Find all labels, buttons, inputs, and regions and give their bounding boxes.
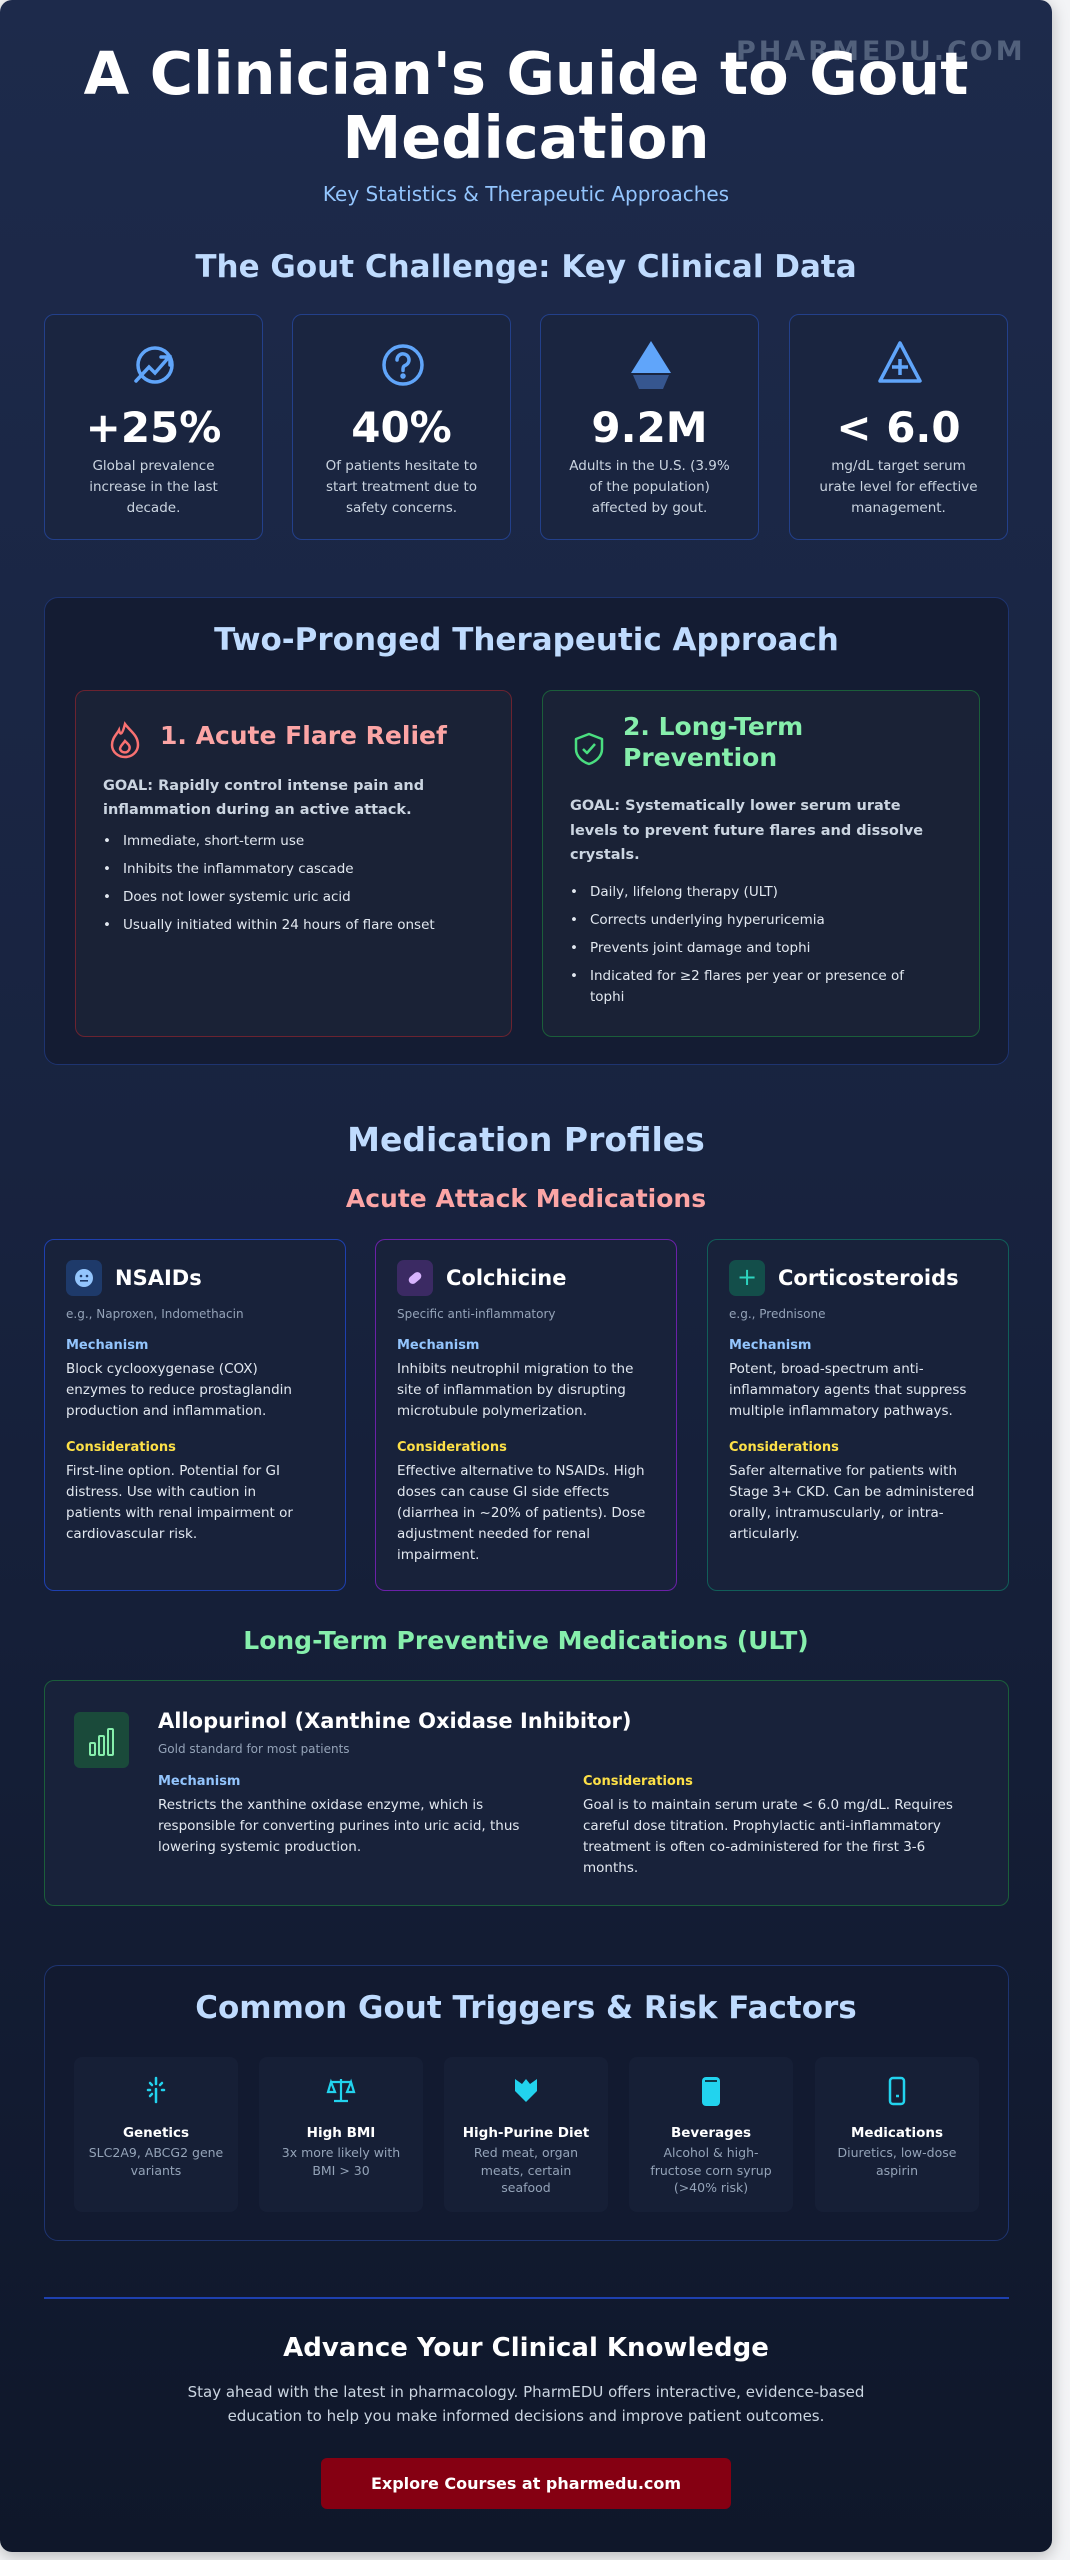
trigger: medications: Medications (851, 2125, 943, 2141)
considerations: Considerations (729, 1440, 839, 1455)
icon: plus: + (737, 1263, 757, 1291)
stat card: prevalence: Global prevalence increase in the last decade. (89, 458, 218, 516)
card: NSAIDs (44, 1239, 346, 1591)
title: Allopurinol (Xanthine Oxidase Inhibitor) (158, 1709, 632, 1733)
mechanism: Mechanism (397, 1338, 479, 1353)
mechanism: Inhibits neutrophil migration to the site of inflammation by disrupting microtubule polymerization. (397, 1361, 633, 1419)
icon: face (66, 1260, 102, 1296)
card: allopurinol (44, 1680, 1009, 1906)
title: 2. Long-Term (623, 712, 803, 741)
heading: Two-Pronged Therapeutic Approach (214, 622, 839, 658)
heading: gout challenge: The Gout Challenge: Key Clinical Data (195, 249, 857, 285)
trigger: BMI: High BMI (307, 2125, 375, 2141)
considerations: Considerations (583, 1774, 693, 1789)
divider (44, 2297, 1009, 2299)
bullets: Does not lower systemic uric acid (123, 889, 351, 905)
trigger: genetics: Genetics (123, 2125, 189, 2141)
card: Colchicine (375, 1239, 677, 1591)
trigger: BMI (259, 2057, 423, 2212)
trigger: BMI: 3x more likely with BMI > 30 (282, 2145, 400, 2178)
stat card: hesitate: 40% (351, 403, 452, 452)
mechanism: Restricts the xanthine oxidase enzyme, which is responsible for converting purines into uric acid, thus lowering systemic production. (158, 1797, 519, 1855)
icon: pill (397, 1260, 433, 1296)
title: 1. Acute Flare Relief (160, 721, 447, 750)
icon: drop (631, 341, 671, 389)
icon: plus (729, 1260, 765, 1296)
considerations: Safer alternative for patients with Stage 3+ CKD. Can be administered orally, intramuscularly, or intra-articularly. (729, 1463, 974, 1542)
watermark: PHARMEDU.COM (736, 36, 1026, 67)
considerations: First-line option. Potential for GI distress. Use with caution in patients with renal impairment or cardiovascular risk. (66, 1463, 293, 1542)
icon: trend (134, 346, 174, 384)
bullets: Usually initiated within 24 hours of flare onset (123, 917, 435, 933)
button: explore courses (321, 2458, 731, 2509)
stat card: hesitate: Of patients hesitate to start treatment due to safety concerns. (326, 458, 477, 516)
icon: question (382, 344, 424, 386)
stat card: target: urate level for effective management. (819, 479, 978, 516)
card: NSAIDs: e.g., Naproxen, Indomethacin (66, 1307, 244, 1321)
heading: medication profiles: Medication Profiles (347, 1120, 705, 1159)
mechanism: Mechanism (158, 1774, 240, 1789)
bullets: Corrects underlying hyperuricemia (590, 912, 825, 928)
trigger: diet: High-Purine Diet (463, 2125, 589, 2141)
card: Colchicine: Specific anti-inflammatory (397, 1307, 556, 1321)
goal: GOAL: Systematically lower serum urate levels to prevent future flares and dissolve crystals. (570, 798, 923, 863)
considerations: Goal is to maintain serum urate < 6.0 mg/dL. Requires careful dose titration. Prophylactic anti-inflammatory treatment is often co-administered for the first 3-6 months. (583, 1797, 953, 1876)
heading: triggers: Common Gout Triggers & Risk Factors (195, 1990, 857, 2026)
bullets (572, 884, 904, 1005)
considerations: Considerations (66, 1440, 176, 1455)
mechanism: Mechanism (729, 1338, 811, 1353)
goal: GOAL: Rapidly control intense pain and inflammation during an active attack. (103, 778, 424, 818)
panel: two-pronged approach (44, 597, 1009, 1065)
title (623, 712, 803, 772)
trigger: beverages: Beverages (671, 2125, 751, 2141)
trigger: diet (444, 2057, 608, 2212)
icon: bars (74, 1712, 129, 1768)
stat card: prevalence: +25% (86, 403, 221, 452)
subheading: acute attack: Acute Attack Medications (346, 1184, 706, 1213)
stat card: hesitate (292, 314, 511, 540)
stat card: target: mg/dL target serum (831, 458, 966, 474)
stat card: prevalence (44, 314, 263, 540)
trigger: beverages (629, 2057, 793, 2212)
bullets: Prevents joint damage and tophi (590, 940, 810, 956)
stat card: adults (540, 314, 759, 540)
considerations: Considerations (397, 1440, 507, 1455)
heading: advance knowledge: Advance Your Clinical Knowledge (283, 2333, 769, 2363)
mechanism: Potent, broad-spectrum anti-inflammatory agents that suppress multiple inflammatory pathways. (729, 1361, 966, 1419)
card: Corticosteroids (707, 1239, 1009, 1591)
stat card: adults: 9.2M (591, 403, 708, 452)
bullets: Inhibits the inflammatory cascade (123, 861, 354, 877)
stat card: target (789, 314, 1008, 540)
bullets (105, 833, 435, 933)
bullets: Daily, lifelong therapy (ULT) (590, 884, 778, 900)
mechanism: Mechanism (66, 1338, 148, 1353)
card: Corticosteroids: e.g., Prednisone (729, 1307, 825, 1321)
trigger: genetics: SLC2A9, ABCG2 gene variants (89, 2145, 223, 2178)
icon: shield (574, 732, 604, 766)
card: Colchicine: Colchicine (446, 1266, 566, 1290)
stat card: target: < 6.0 (836, 403, 961, 452)
mechanism: Block cyclooxygenase (COX) enzymes to reduce prostaglandin production and inflammation. (66, 1361, 292, 1419)
card: NSAIDs: NSAIDs (115, 1266, 202, 1290)
title (84, 39, 968, 172)
panel: triggers (44, 1965, 1009, 2241)
stat card: adults: Adults in the U.S. (3.9% of the population) affected by gout. (569, 458, 730, 516)
subtitle: Key Statistics & Therapeutic Approaches (323, 182, 729, 206)
card: Corticosteroids: Corticosteroids (778, 1266, 959, 1290)
icon: warning (878, 341, 922, 383)
trigger: medications (815, 2057, 979, 2212)
considerations: Effective alternative to NSAIDs. High doses can cause GI side effects (diarrhea in ~20% of patients). Dose adjustment needed for renal impairment. (397, 1463, 645, 1563)
trigger: genetics (74, 2057, 238, 2212)
trigger: beverages: Alcohol & high-fructose corn syrup (>40% risk) (650, 2145, 772, 2195)
title: Medication (343, 103, 709, 172)
subheading: long-term ULT: Long-Term Preventive Medications (ULT) (243, 1626, 809, 1655)
card: allopurinol: Gold standard for most patients (158, 1742, 350, 1756)
title: A Clinician's Guide to Gout (84, 39, 968, 108)
title: Prevention (623, 743, 777, 772)
button: explore courses: Explore Courses at pharmedu.com (371, 2474, 681, 2493)
icon: flame (110, 721, 140, 758)
box: acute flare relief (75, 690, 512, 1037)
bullets: Immediate, short-term use (123, 833, 304, 849)
trigger: medications: Diuretics, low-dose aspirin (838, 2145, 956, 2178)
text: cta description: Stay ahead with the latest in pharmacology. PharmEDU offers interactive, evidence-based education to help you make informed decisions and improve patient outcomes. (188, 2383, 864, 2425)
trigger: diet: Red meat, organ meats, certain seafood (474, 2145, 578, 2195)
box: long-term prevention (542, 690, 980, 1037)
bullets: Indicated for ≥2 flares per year or presence of tophi (590, 968, 904, 1005)
